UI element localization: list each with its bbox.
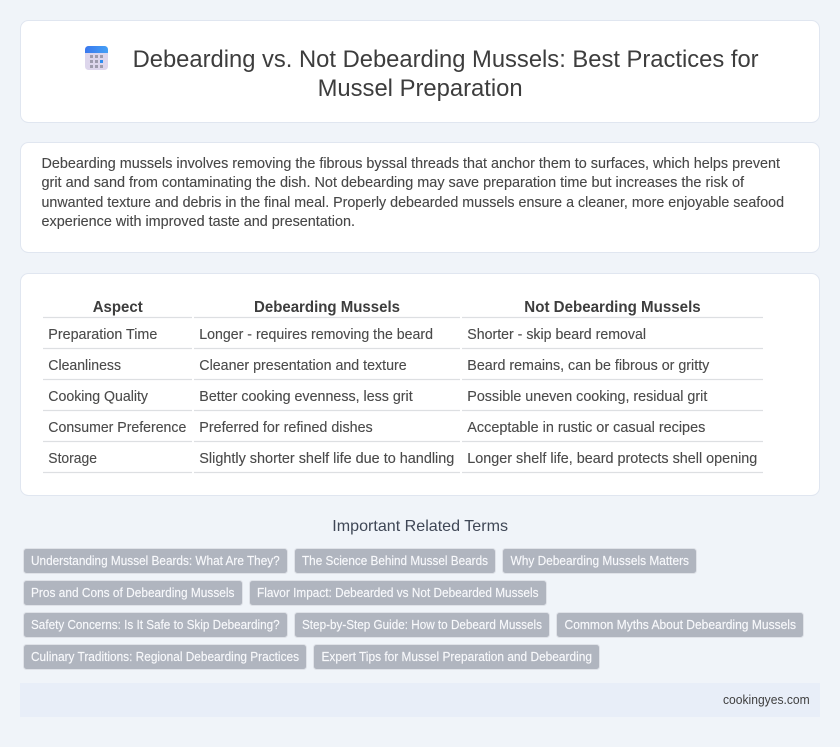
footer: cookingyes.com bbox=[723, 692, 810, 707]
related term tags: Safety Concerns: Is It Safe to Skip Debearding? bbox=[31, 617, 280, 632]
related term tags: Common Myths About Debearding Mussels bbox=[564, 617, 796, 632]
related term tags: Pros and Cons of Debearding Mussels bbox=[31, 585, 234, 600]
title: Mussel Preparation bbox=[318, 75, 523, 102]
panel: title card bbox=[20, 20, 820, 122]
heading: important related terms: Important Related Terms bbox=[332, 518, 508, 535]
related term tags bbox=[24, 548, 804, 670]
panel: introduction text: Debearding mussels involves removing the fibrous byssal threads that anchor them to surfaces, which helps prevent bbox=[42, 156, 780, 172]
related term tags: Why Debearding Mussels Matters bbox=[510, 553, 689, 568]
panel: introduction text: unwanted texture and debris in the final meal. Properly debearded mussels ensure a cleaner, more enjoyable seafood bbox=[42, 195, 784, 211]
related term tags: Culinary Traditions: Regional Debearding Practices bbox=[31, 649, 299, 664]
table row: consumer preference bbox=[48, 420, 705, 436]
table row: consumer preference: Preferred for refined dishes bbox=[199, 420, 373, 436]
table row: consumer preference: Consumer Preference bbox=[48, 420, 186, 436]
table header bbox=[93, 299, 701, 316]
table row: preparation time: Shorter - skip beard removal bbox=[467, 327, 646, 343]
table row: cleanliness: Cleanliness bbox=[48, 358, 121, 374]
related term tags: Flavor Impact: Debearded vs Not Debearded Mussels bbox=[257, 585, 538, 600]
table row: cleanliness bbox=[48, 358, 710, 374]
table row: cleanliness: Beard remains, can be fibrous or gritty bbox=[467, 358, 710, 374]
table row: cooking quality bbox=[48, 389, 707, 405]
table row: storage: Longer shelf life, beard protects shell opening bbox=[467, 451, 757, 467]
table row: storage: Storage bbox=[48, 451, 97, 467]
panel: introduction text: experience with improved taste and presentation. bbox=[42, 214, 355, 230]
table row: storage bbox=[48, 451, 757, 467]
table row: cooking quality: Better cooking evenness, less grit bbox=[199, 389, 413, 405]
table row: preparation time bbox=[48, 327, 646, 343]
footer bbox=[20, 683, 820, 717]
related term tags: Expert Tips for Mussel Preparation and Debearding bbox=[322, 649, 592, 664]
title: Debearding vs. Not Debearding Mussels: Best Practices for bbox=[133, 46, 759, 73]
table row: consumer preference: Acceptable in rustic or casual recipes bbox=[467, 420, 705, 436]
icon: calendar bbox=[85, 46, 108, 70]
related term tags: The Science Behind Mussel Beards bbox=[302, 553, 488, 568]
panel: introduction text: grit and sand from contaminating the dish. Not debearding may save preparation time but increases the risk of bbox=[42, 175, 745, 191]
table row: preparation time: Preparation Time bbox=[48, 327, 157, 343]
table header: Debearding Mussels bbox=[254, 299, 400, 316]
table row: cleanliness: Cleaner presentation and texture bbox=[199, 358, 407, 374]
table header: Aspect bbox=[93, 299, 143, 316]
panel: comparison table bbox=[20, 274, 820, 496]
related term tags: Step-by-Step Guide: How to Debeard Mussels bbox=[302, 617, 542, 632]
table row: storage: Slightly shorter shelf life due to handling bbox=[199, 451, 454, 467]
panel: introduction text bbox=[20, 142, 820, 252]
related term tags: Understanding Mussel Beards: What Are They? bbox=[31, 553, 280, 568]
table row: cooking quality: Possible uneven cooking, residual grit bbox=[467, 389, 707, 405]
table header: Not Debearding Mussels bbox=[524, 299, 701, 316]
table row: preparation time: Longer - requires removing the beard bbox=[199, 327, 433, 343]
table row: cooking quality: Cooking Quality bbox=[48, 389, 149, 405]
title bbox=[133, 46, 759, 102]
